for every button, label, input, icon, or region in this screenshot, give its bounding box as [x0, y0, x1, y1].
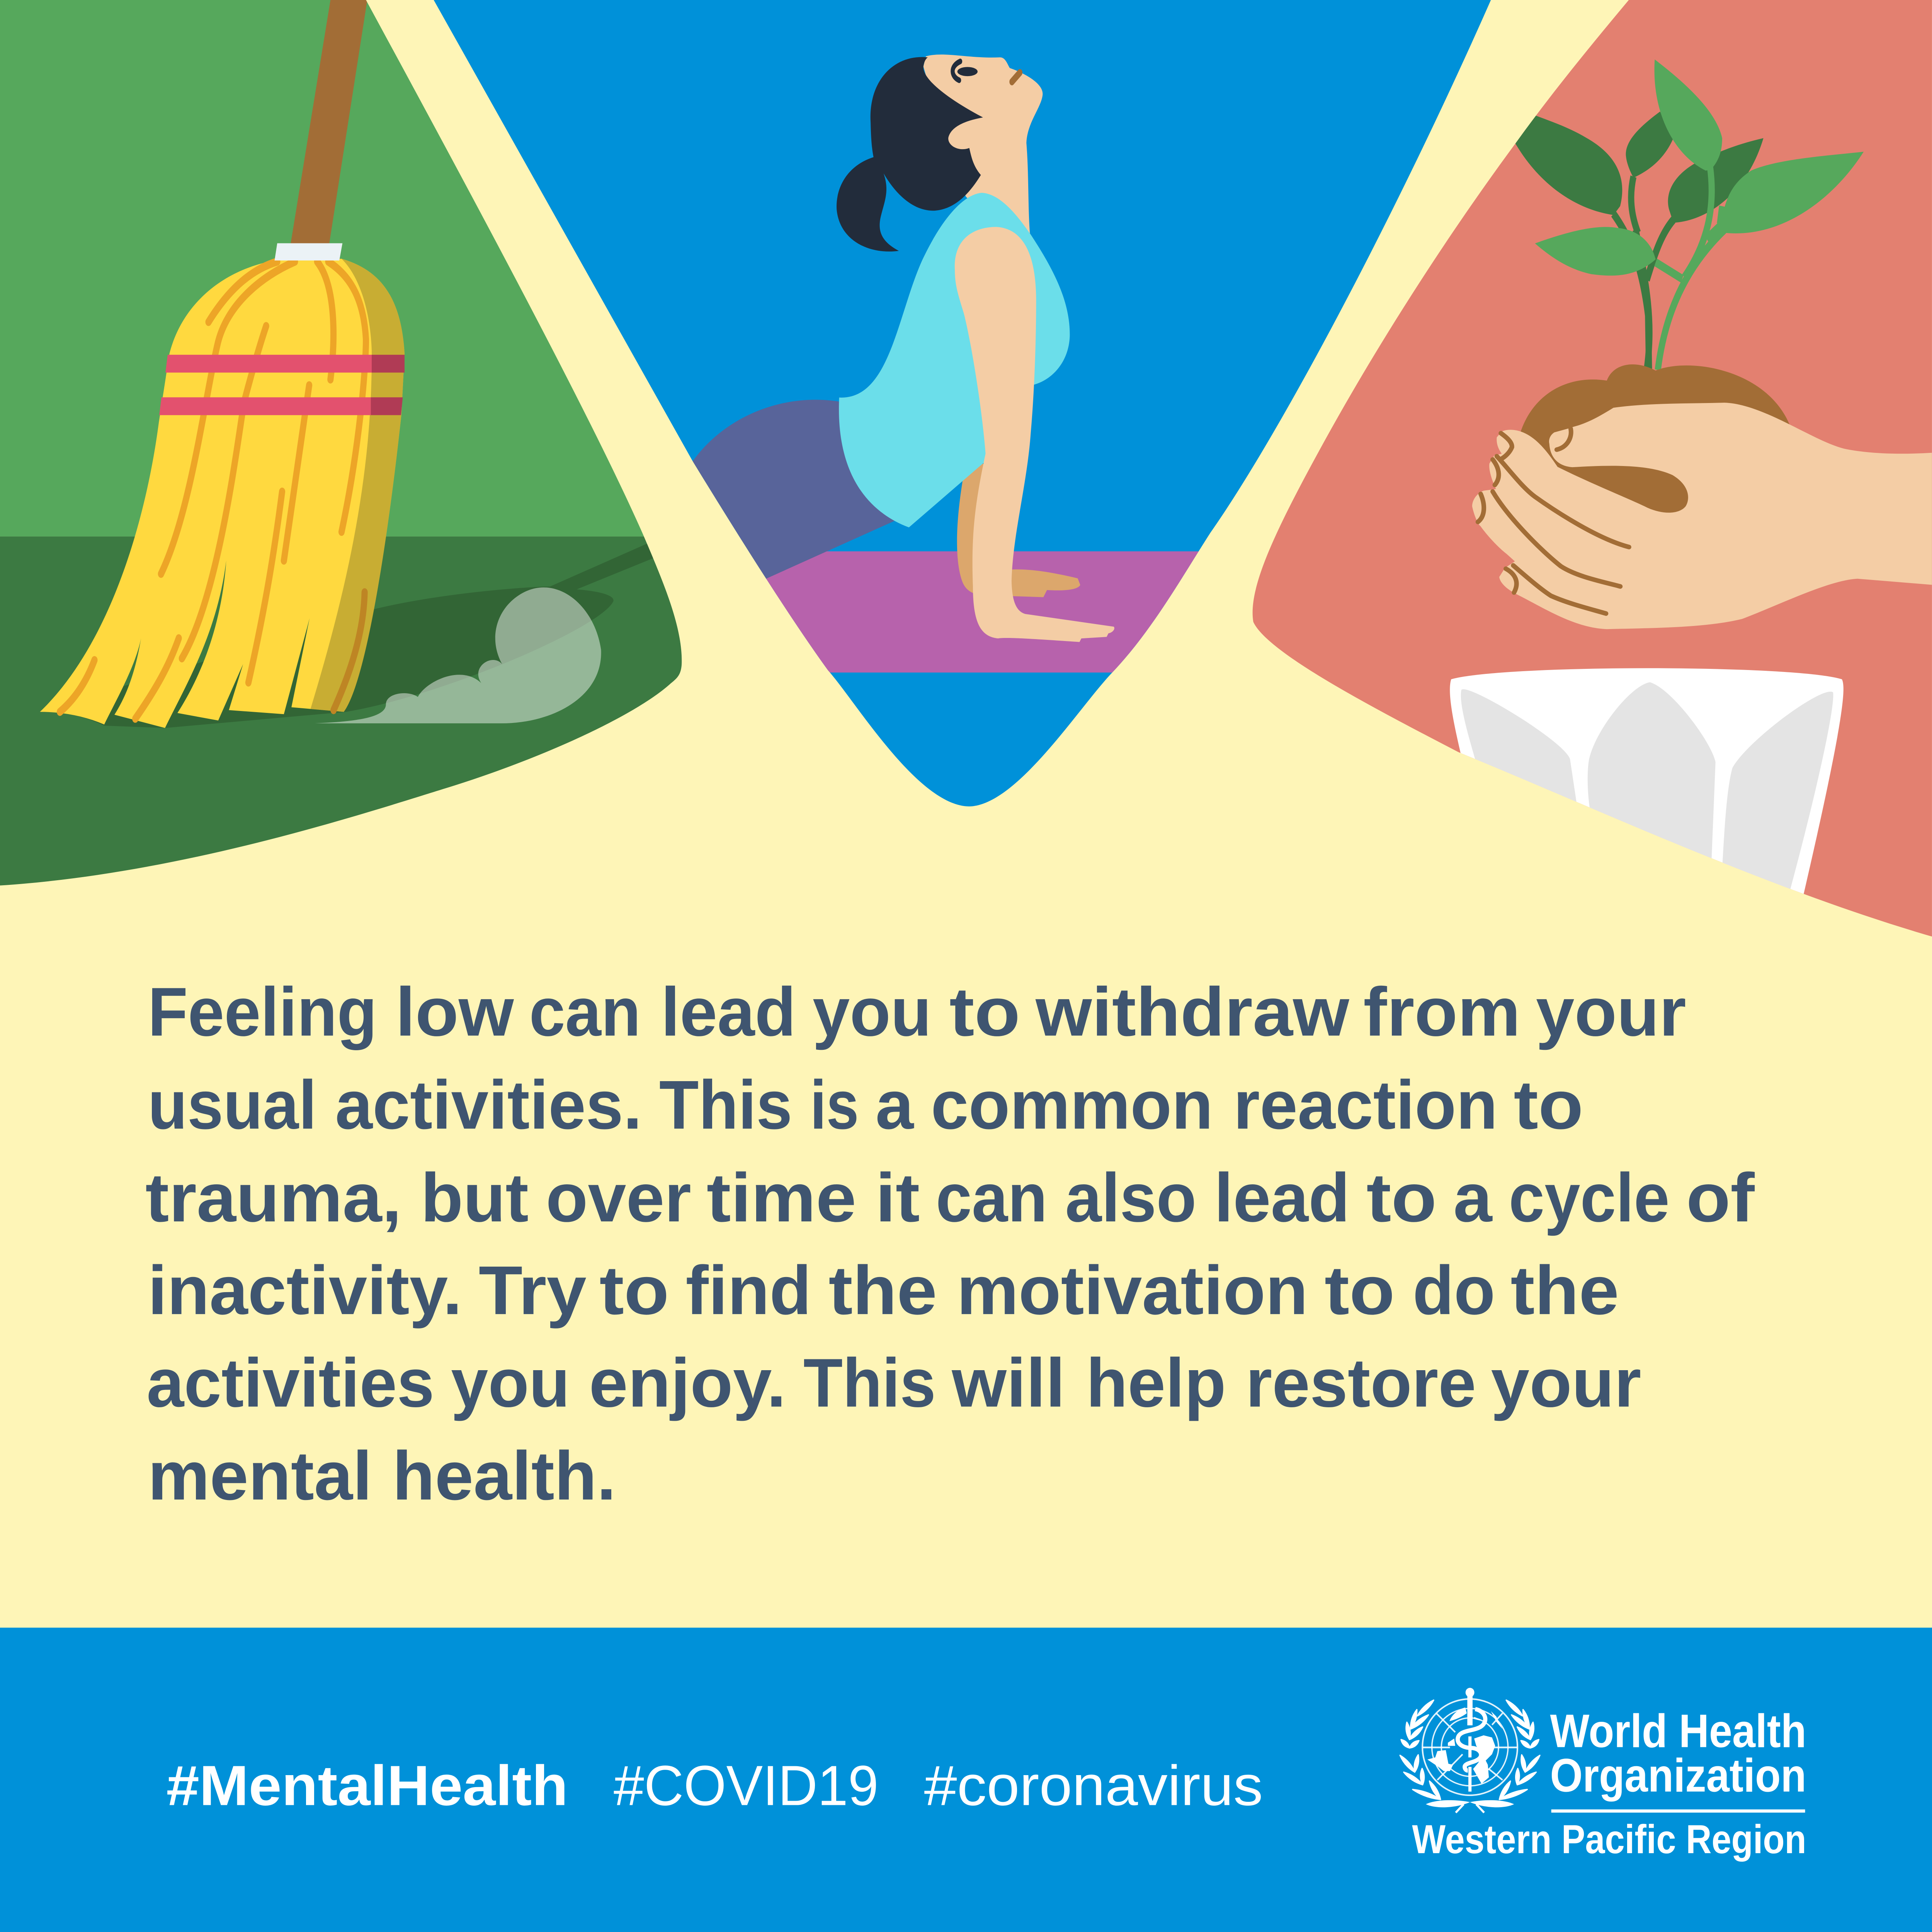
- dust cloud: [315, 587, 601, 723]
- broom head: [40, 259, 405, 728]
- finger lines and nails: [1478, 429, 1629, 614]
- line 2: is: [810, 1066, 859, 1143]
- line 1: [148, 973, 1686, 1050]
- broom shadow: [40, 543, 654, 728]
- line 4: motivation: [957, 1252, 1308, 1329]
- salmon background: [1192, 0, 1932, 996]
- line 5: enjoy.: [589, 1344, 786, 1421]
- line 4: do: [1413, 1252, 1495, 1329]
- line 3: time: [707, 1159, 856, 1236]
- line 2: [148, 1066, 1583, 1143]
- yoga mat: [572, 551, 1294, 673]
- line 1: low: [396, 973, 514, 1050]
- green wall: [0, 0, 710, 536]
- line 5: restore: [1246, 1344, 1476, 1421]
- line 1: your: [1536, 973, 1686, 1050]
- WHO emblem: [1400, 1688, 1540, 1813]
- dark green floor: [0, 536, 710, 905]
- cupped hand: [1472, 403, 1932, 629]
- broom handle: [291, 0, 367, 244]
- line 3: it: [876, 1159, 920, 1236]
- line 1: lead: [661, 973, 796, 1050]
- continents: [1427, 1711, 1503, 1784]
- line 5: [146, 1344, 1641, 1421]
- line 4: the: [828, 1252, 937, 1329]
- broom white collar: [275, 243, 342, 260]
- line 5: This: [803, 1344, 936, 1421]
- line 5: help: [1086, 1344, 1226, 1421]
- line 3: a: [1453, 1159, 1493, 1236]
- woman on yoga mat: [572, 54, 1294, 673]
- hashtags: #MentalHealth: [166, 1754, 568, 1818]
- line 6: health.: [393, 1437, 616, 1514]
- line 5: you: [451, 1344, 570, 1421]
- panel: plant in hand: [1192, 0, 1932, 996]
- line 4: the: [1510, 1252, 1619, 1329]
- line 3: over: [546, 1159, 691, 1236]
- line 1: withdraw: [1035, 973, 1350, 1050]
- WHO logo: [1400, 1688, 1806, 1862]
- line 4: [148, 1252, 1619, 1329]
- hashtags: #COVID19: [614, 1754, 879, 1818]
- panel: yoga: [419, 0, 1503, 813]
- head and neck: [923, 54, 1043, 240]
- line 3: also: [1065, 1159, 1196, 1236]
- hashtags: [166, 1754, 1263, 1818]
- seedling: [1515, 60, 1864, 370]
- line 1: to: [949, 973, 1020, 1050]
- globe rings and grid: [1422, 1699, 1517, 1795]
- main message text: [145, 973, 1755, 1514]
- line 1: Feeling: [148, 973, 377, 1050]
- line 2: usual: [148, 1066, 317, 1143]
- line 6: mental: [148, 1437, 372, 1514]
- hashtags: #coronavirus: [924, 1754, 1263, 1818]
- line 4: to: [1325, 1252, 1395, 1329]
- hand and arm: [1472, 403, 1932, 629]
- line 2: to: [1514, 1066, 1583, 1143]
- line 2: reaction: [1233, 1066, 1498, 1143]
- line 5: activities: [146, 1344, 434, 1421]
- blue background: [419, 0, 1503, 813]
- line 3: trauma,: [145, 1159, 402, 1236]
- WHO wordmark: Organization: [1550, 1749, 1806, 1801]
- line 6: [148, 1437, 616, 1514]
- line 5: your: [1491, 1344, 1641, 1421]
- ribbon: [1426, 1800, 1514, 1813]
- right laurel: [1499, 1700, 1540, 1799]
- line 3: to: [1366, 1159, 1437, 1236]
- line 5: will: [951, 1344, 1065, 1421]
- line 2: common: [931, 1066, 1213, 1143]
- WHO wordmark: Western Pacific Region: [1412, 1817, 1806, 1862]
- line 4: Try: [479, 1252, 587, 1329]
- WHO wordmark: World Health: [1550, 1705, 1806, 1757]
- panel: sweeping broom: [0, 0, 710, 905]
- line 4: find: [686, 1252, 811, 1329]
- line 1: from: [1363, 973, 1520, 1050]
- line 3: cycle: [1509, 1159, 1670, 1236]
- footer band: [0, 1628, 1932, 1932]
- line 3: [145, 1159, 1755, 1236]
- line 2: This: [659, 1066, 792, 1143]
- front arm: [955, 227, 1114, 642]
- line 3: of: [1686, 1159, 1755, 1236]
- line 1: can: [529, 973, 641, 1050]
- tank top: [839, 193, 1070, 527]
- plant pot: [1450, 668, 1844, 948]
- legs: [608, 400, 897, 662]
- face details: [952, 61, 1020, 82]
- line 2: a: [876, 1066, 914, 1143]
- line 3: lead: [1214, 1159, 1350, 1236]
- line 4: inactivity.: [148, 1252, 462, 1329]
- WHO wordmark: [1412, 1705, 1806, 1862]
- line 3: can: [936, 1159, 1047, 1236]
- back arm: [957, 464, 1080, 597]
- soil: [1520, 364, 1791, 517]
- left laurel: [1400, 1700, 1440, 1799]
- line 4: to: [599, 1252, 669, 1329]
- line 2: activities.: [335, 1066, 642, 1143]
- rod of Asclepius: [1449, 1688, 1485, 1792]
- line 1: you: [813, 973, 932, 1050]
- line 3: but: [421, 1159, 529, 1236]
- hair: [837, 57, 983, 252]
